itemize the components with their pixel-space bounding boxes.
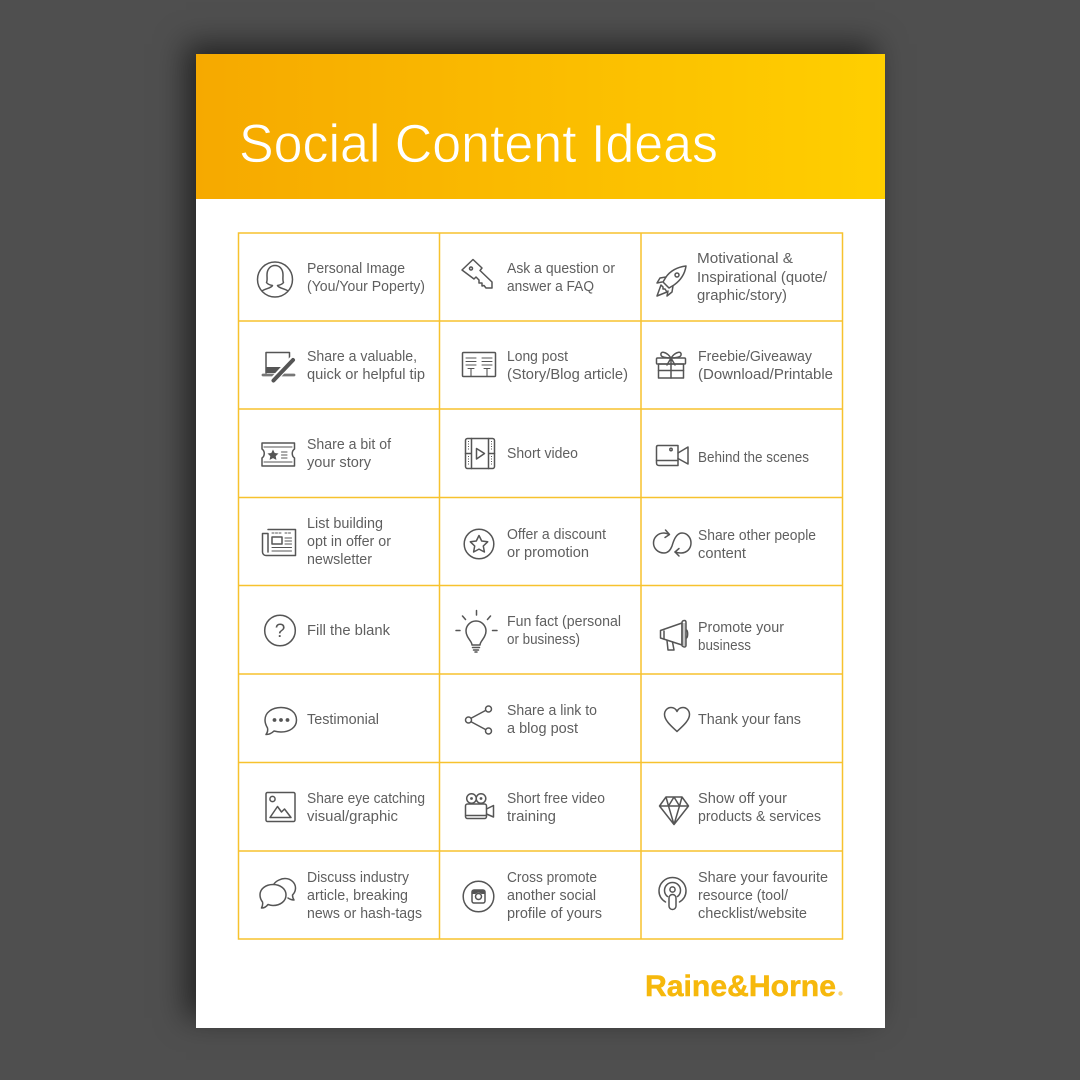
text: motivational: graphic/story) [697,288,787,304]
text: promote business: business [698,638,751,654]
cell: testimonial [265,708,379,734]
text: helpful tip: quick or helpful tip [307,367,425,383]
text: favourite resource: checklist/website [698,906,807,922]
text: behind the scenes: Behind the scenes [698,450,809,466]
cell: products and services [660,791,821,825]
text: list building: newsletter [307,552,372,568]
text: cross promote: profile of yours [507,906,602,922]
text: video training: Short free video [507,791,605,807]
text: testimonial: Testimonial [307,712,379,728]
icon: instagram camera [463,881,494,912]
text: visual graphic: visual/graphic [307,809,398,825]
logo: Raine&Horne: Raine&Horne [645,970,836,1003]
text: your story [307,437,392,471]
text: personal image: (You/Your Poperty) [307,279,425,295]
text: short video: Short video [507,446,578,462]
icon: video camera [656,446,688,466]
text: freebie: (Download/Printable [698,367,833,383]
text: fun fact: or business) [507,632,580,648]
text: share a link: Share a link to [507,703,597,719]
text: discount [507,527,606,561]
cell: personal image [258,261,425,297]
cell: fill the blank [265,615,391,646]
icon: share nodes [466,706,492,734]
text: your story: your story [307,455,372,471]
icon: key [462,260,492,288]
text: visual graphic [307,791,425,825]
text: fill the blank: Fill the blank [307,623,391,639]
cell: your story [262,437,392,471]
cell: share a link [466,703,597,737]
icon: diamond [660,797,688,824]
text: cross promote: another social [507,888,596,904]
text: freebie [698,349,833,383]
icon: light bulb [456,610,497,652]
text: video training [507,791,605,825]
text: share a link [507,703,597,737]
text: helpful tip: Share a valuable, [307,349,417,365]
icon: person portrait [258,262,292,297]
text: long post: Long post [507,349,568,365]
icon: star badge [464,529,494,559]
text: products and services: Show off your [698,791,787,807]
header banner [196,54,885,199]
icon: podcast [659,878,686,910]
text: products and services: products & services [698,809,821,825]
text: cross promote [507,870,602,922]
icon: film strip [466,438,494,468]
text: list building [307,516,391,568]
text: fun fact [507,614,621,648]
text: ask a question: answer a FAQ [507,279,594,295]
text: favourite resource: Share your favourite [698,870,828,886]
cell: freebie [656,349,833,383]
icon: heart [664,708,690,732]
text: discuss industry: article, breaking [307,888,408,904]
cell: visual graphic [266,791,425,825]
cell: promote business [660,620,784,654]
cell: cross promote [463,870,602,922]
icon: two speech bubbles [260,878,296,908]
icon: ticket [262,443,294,466]
title: Social Content Ideas [239,114,718,174]
text: favourite resource [698,870,828,922]
table grid [238,233,842,939]
text: personal image [307,261,425,295]
icon: open book [462,352,496,376]
text: products and services [698,791,821,825]
icon: newspaper [262,530,296,556]
text: long post [507,349,628,383]
text: ask a question: Ask a question or [507,261,615,277]
icon: picture frame [266,792,295,822]
text: discuss industry: Discuss industry [307,870,410,886]
icon: gift [656,352,686,378]
text: share a link: a blog post [507,721,578,737]
text: visual graphic: Share eye catching [307,791,425,807]
text: thank your fans: Thank your fans [698,712,801,728]
cell: short video [466,438,578,468]
icon: question mark: ? [275,621,285,642]
text: video training: training [507,809,556,825]
cell: motivational [657,251,828,304]
icon: megaphone [660,620,688,650]
cell: discount [464,527,606,561]
text: cross promote: Cross promote [507,870,597,886]
icon: loop arrows [654,530,691,556]
text: favourite resource: resource (tool/ [698,888,789,904]
text: discount: Offer a discount [507,527,606,543]
text: helpful tip [307,349,425,383]
text: motivational: Motivational & [697,251,793,267]
cell: long post [462,349,628,383]
cell: ask a question [462,260,615,295]
cell: video training [466,791,605,825]
cell: thank your fans [664,708,801,732]
text: freebie: Freebie/Giveaway [698,349,813,365]
icon: speech bubble [265,708,296,734]
text: your story: Share a bit of [307,437,392,453]
cell: discuss industry [260,870,422,922]
text: ask a question [507,261,615,295]
cell: fun fact [456,610,621,652]
text: share other content: content [698,546,746,562]
cell: list building [262,516,391,568]
text: list building: opt in offer or [307,534,391,550]
text: share other content [698,528,816,562]
text: discuss industry: news or hash-tags [307,906,422,922]
text: share other content: Share other people [698,528,816,544]
text: fun fact: Fun fact (personal [507,614,621,630]
cell: favourite resource [659,870,828,922]
text: discount: or promotion [507,545,589,561]
cell: share other content [654,528,816,562]
icon: laptop and pen [263,352,294,380]
text: motivational [697,251,828,304]
panel: poster card [196,54,885,1028]
cell: behind the scenes [656,446,809,466]
text: list building: List building [307,516,383,532]
text: discuss industry [307,870,422,922]
icon: rocket [657,266,686,296]
text: promote business [698,620,784,654]
text: motivational: Inspirational (quote/ [697,270,828,286]
text: personal image: Personal Image [307,261,405,277]
cell: helpful tip [263,349,425,383]
icon: film camera [466,794,494,818]
text: promote business: Promote your [698,620,784,636]
text: long post: (Story/Blog article) [507,367,628,383]
